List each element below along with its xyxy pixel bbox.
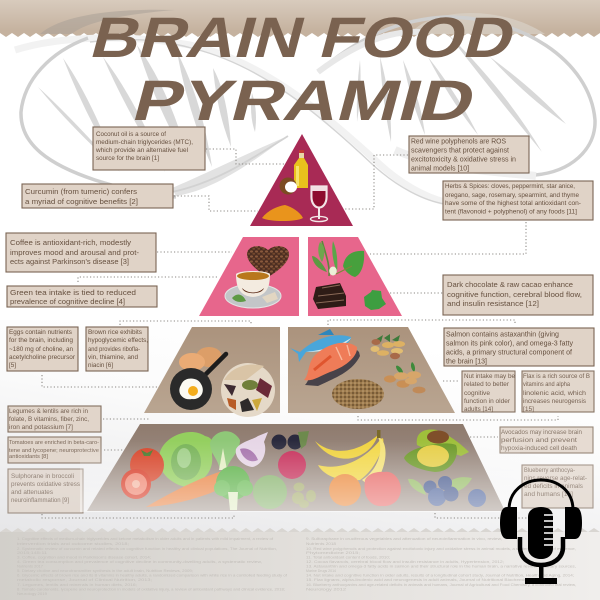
- callout: red wine: animal models [10]: [411, 166, 469, 172]
- references: left column: 7. Legumes, lentils and minerals in human diets, 2016;: [17, 583, 137, 587]
- callout: avocados: hypoxia-induced cell death: [501, 446, 577, 452]
- callout: sulphorane: and attenuates: [11, 490, 53, 496]
- callout: brown rice: Brown rice exhibits: [88, 330, 142, 336]
- callout: salmon: the brain [13]: [446, 358, 487, 366]
- callout: sulphorane: [8, 469, 83, 513]
- title: [85, 6, 523, 133]
- callout: salmon: salmon its pink color), and omega-3 fatty: [446, 340, 573, 348]
- callout: tomatoes: [8, 437, 101, 463]
- callout: dark chocolate: cognitive function, cerebral blood flow,: [447, 290, 582, 299]
- references: left column: intervention trials and outcome studies, 2018;: [17, 542, 129, 546]
- pyramid tier 3: eggs, rice, fish and nuts: [144, 327, 455, 417]
- callout: coconut oil: [93, 127, 205, 170]
- icon: almonds: [384, 362, 426, 393]
- references: right column: Phytomedicine 2015;: [306, 551, 360, 555]
- icon: coconut: [280, 178, 297, 194]
- icon: wine glass: [310, 186, 328, 222]
- callout: flax: vitamins and alpha: [523, 382, 571, 388]
- icon: blackberries: [272, 431, 309, 450]
- icon: walnuts: [370, 334, 405, 359]
- references: right column: 13. Astaxanthin and omega-3 fatty acids in salmon and their structural role in the human brain, a narrative review of dietary sources,: [306, 564, 576, 568]
- icon: apple: [364, 472, 401, 506]
- callout: eggs: ~180 mg of choline, an: [9, 347, 73, 353]
- callout: coconut oil: Coconut oil is a source of: [96, 132, 166, 138]
- callout: blueberry: and humans [16]: [524, 492, 573, 498]
- callout: brown rice: vin, thiamine, and: [88, 355, 138, 361]
- icon: cabbage: [159, 432, 213, 487]
- callout: eggs: [5]: [9, 363, 16, 369]
- references: right column: 14. Nut intake and cognitive function in older adults, results of a longitudinal cohort study, Journal of Nutrition, Health and Aging, 2014;: [306, 574, 574, 578]
- left callout boxes: [6, 127, 205, 513]
- footer references: [17, 537, 576, 596]
- callout: curcumin: Curcumin (from tumeric) confers: [25, 187, 137, 196]
- icon: bowl of legumes: [221, 363, 275, 417]
- callout: tomatoes: tene and lycopene; neuroprotective: [9, 448, 99, 454]
- callout: dark chocolate: Dark chocolate & raw cacao enhance: [447, 280, 573, 289]
- references: right column: 16. Blueberry anthocyanins and age-related deficits in animals and humans, Journal of Agricultural and Food Chemistry, a controlled trial review,: [306, 583, 576, 587]
- callout: legumes: iron and potassium [7]: [9, 425, 73, 431]
- callout: flax: [15]: [523, 407, 534, 413]
- callout: herbs and spices: oregano, sage, rosemary, spearmint, and thyme: [445, 193, 580, 199]
- references: right column: Neurology 2012: [306, 588, 346, 592]
- callout: green tea: Green tea intake is tied to reduced: [10, 288, 136, 297]
- DNA helix background: [15, 17, 595, 204]
- callout: herbs and spices: tent (flavonoid + polyphenol) of any foods [11]: [445, 210, 577, 216]
- references: left column: metabolic response, Journal of Clinical Nutrition, 2013;: [17, 578, 152, 582]
- references: left column: 2. Systematic review of curcumin and related effects on cognitive function in healthy and clinical populations, The Journal of Nutrition,: [17, 547, 277, 551]
- callout: nuts: adults [14]: [464, 407, 493, 413]
- callout: tomatoes: Tomatoes are enriched in beta-caro-: [9, 440, 99, 446]
- icon: tea cup and saucer: [225, 271, 281, 308]
- callout: red wine: [409, 136, 529, 173]
- callout: eggs: [7, 327, 78, 371]
- callout: coffee: improves mood and arousal and prot-: [10, 248, 140, 257]
- references: right column: 11. Total antioxidant content of foods, 2010;: [306, 556, 390, 560]
- icon: pomegranate: [278, 451, 306, 479]
- callout: blueberry: ed deficits in animals: [524, 484, 583, 490]
- callout: nuts: function in older: [464, 399, 510, 405]
- callout: nuts: cognitive: [464, 391, 491, 397]
- icon: salmon steak: [304, 343, 360, 386]
- fade over lower pyramid: [80, 440, 520, 512]
- icon: broccoli: [214, 466, 253, 510]
- icon: flax seeds: [332, 379, 384, 409]
- icon: frying pan with egg: [170, 354, 226, 410]
- callout: blueberry: Blueberry anthocya-: [524, 468, 575, 474]
- icon: carrot: [146, 469, 230, 507]
- references: left column: 4. Green tea consumption and prevalence of cognitive decline in community-dwelling adults, a systematic review,: [17, 560, 262, 564]
- references: right column: 9. Sulforaphane in cruciferous vegetables and attenuation of neuroinflammation in vivo, review,: [306, 537, 502, 541]
- callout: flax: increases neurogensis: [523, 399, 586, 405]
- callout: sulphorane: neuroinflammation [9]: [11, 498, 69, 504]
- callout: red wine: excitotoxicity & oxidative stress in: [411, 156, 516, 164]
- callout: green tea: prevalence of cognitive decline [4]: [10, 297, 125, 306]
- callout: brown rice: [86, 327, 148, 371]
- callout: curcumin: a myriad of cognitive benefits [2]: [25, 197, 138, 206]
- callout: eggs: acetylcholine precursor: [9, 355, 75, 361]
- callout: eggs: for the brain, including: [9, 338, 73, 344]
- icon: garlic: [236, 432, 268, 467]
- callout: coconut oil: source for the brain [1]: [96, 156, 159, 162]
- references: right column: 15. Flax lignans, alpha-linolenic acid and neurogenesis in adult animals, Journal of Nutritional Biochemistry, 2016;: [306, 578, 546, 582]
- callout: legumes: [8, 406, 101, 432]
- callout: salmon: Salmon contains astaxanthin (giving: [446, 332, 559, 338]
- title: PYRAMID: [127, 69, 483, 133]
- callout: coffee: ects against Parkinson's disease [3]: [10, 257, 129, 266]
- callout: herbs and spices: have some of the highest total antioxidant con-: [445, 201, 581, 207]
- callout: flax: Flax is a rich source of B: [523, 374, 590, 380]
- icon: fresh herbs: [312, 241, 364, 277]
- right callout boxes: [409, 136, 594, 508]
- callout: eggs: Eggs contain nutrients: [9, 330, 72, 336]
- callout: legumes: folate, B vitamins, fiber, zinc,: [9, 417, 89, 423]
- icon: oil bottle: [294, 150, 308, 188]
- callout: dark chocolate: [443, 275, 593, 315]
- icon: orange: [329, 474, 361, 506]
- callout: red wine: scavengers that protect against: [411, 148, 509, 154]
- pyramid tier 2: coffee, tea, herbs and chocolate: [199, 237, 402, 316]
- icon: dark chocolate: [313, 283, 346, 309]
- callout: red wine: Red wine polyphenols are ROS: [411, 138, 506, 146]
- icon: tomatoes: [121, 448, 164, 499]
- footer band with zigzag edge: [0, 525, 600, 600]
- icon: blueberries: [408, 476, 486, 507]
- icon: bananas: [315, 430, 386, 488]
- callout: blueberry: [522, 465, 593, 508]
- callout: avocados: [500, 427, 593, 453]
- references: right column: Nutrients 2018: [306, 542, 336, 546]
- pyramid tier 4: fruits and vegetables: [87, 424, 505, 511]
- callout: green tea: [7, 286, 157, 307]
- callout: nuts: Nut intake may be: [464, 374, 516, 380]
- references: right column: 10. Red wine polyphenols and protection against excitotoxic injury and oxidative stress in animal models, a systematic review of evidence,: [306, 547, 576, 551]
- callout: curcumin: [22, 184, 173, 208]
- callout: brown rice: and provides ribofla-: [88, 347, 140, 353]
- callout: brown rice: hypoglycemic effects,: [88, 338, 148, 344]
- callout: nuts: [462, 371, 516, 413]
- pyramid tier 1: oils, turmeric and wine: [250, 134, 353, 226]
- references: left column: 2015;145:11: [17, 551, 47, 555]
- references: right column: Marine Drugs 2014: [306, 569, 336, 573]
- callout: brown rice: niacin [6]: [88, 363, 113, 369]
- callout: salmon: [444, 328, 594, 366]
- icon: coffee bean heart: [247, 246, 289, 277]
- callout: dark chocolate: and insulin resistance [12]: [447, 299, 539, 308]
- callout: coconut oil: medium-chain triglycerides (MTC),: [96, 140, 193, 146]
- references: right column: 12. Cocoa flavanols, cerebral blood flow and insulin resistance in adults, Hypertension, 2012;: [306, 560, 504, 564]
- references: left column: 1. Cognitive effects of medium-chain triglycerides and ketone metabolism in older adults and in patients with mild impairment, a review of: [17, 537, 273, 541]
- callout: coffee: Coffee is antioxidant-rich, modestly: [10, 238, 131, 247]
- callout: flax: [522, 371, 594, 413]
- callout: sulphorane: prevents oxidative stress: [11, 482, 80, 488]
- icon: mint leaves: [364, 290, 386, 310]
- references: left column: Nutrients 2017: [17, 564, 43, 568]
- callout: flax: linolenic acid, which: [523, 391, 586, 397]
- callout: legumes: Legumes & lentils are rich in: [9, 409, 88, 415]
- references: left column: 6. Glycemic effects of brown rice and its B vitamins in healthy adults, a randomized comparison with white rice in a controlled feeding study of: [17, 574, 287, 578]
- references: left column: 5. Dietary choline and neurotransmitter synthesis in the adult brain, Nutrition Reviews, 2009;: [17, 569, 193, 573]
- icon: eggs: [179, 347, 222, 371]
- references: left column: 8. Tomato carotenoids, lycopene and neuroprotection in models of oxidative injury, a review of antioxidant pathways and clinical evidence, 2018;: [17, 588, 285, 592]
- icon: olives: [292, 482, 316, 508]
- callout: avocados: perfusion and prevent: [501, 438, 577, 444]
- icon: bok choy: [210, 431, 240, 470]
- icon: avocados: [404, 430, 469, 472]
- dotted connector lines: [42, 149, 558, 518]
- icon: podcast microphone with headphones: [500, 480, 582, 584]
- icon: turmeric powder: [262, 205, 303, 221]
- icon: fish: [290, 329, 351, 362]
- callout: salmon: acids, a primary structural component of: [446, 350, 572, 356]
- callout: tomatoes: antioxidants [8]: [9, 454, 49, 460]
- callout: blueberry: nins reverse age-relat-: [524, 476, 587, 482]
- callout: herbs and spices: Herbs & Spices: cloves, peppermint, star anice,: [445, 184, 575, 190]
- callout: coffee: [6, 233, 156, 272]
- references: left column: Neurology 2019: [17, 592, 47, 596]
- callout: coconut oil: which provide an alternative fuel: [95, 148, 188, 154]
- callout: sulphorane: Sulphorane in broccoli: [11, 474, 74, 480]
- callout: nuts: related to better: [464, 382, 509, 388]
- title: BRAIN FOOD: [85, 6, 523, 70]
- callout: herbs and spices: [443, 181, 593, 220]
- top tan band with zigzag edge: [0, 0, 600, 38]
- references: left column: 3. Coffee, cognition and mood in Parkinson's disease cohort, 2014;: [17, 556, 151, 560]
- icon: artichoke: [253, 475, 287, 509]
- callout: avocados: Avocados may increase brain: [501, 430, 582, 436]
